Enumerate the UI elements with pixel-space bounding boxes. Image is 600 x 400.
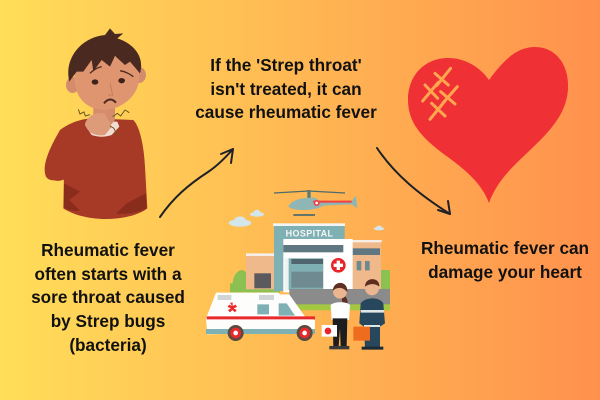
icon: paramedic [353, 279, 385, 350]
text: heart damage: Rheumatic fever can [421, 238, 589, 258]
text: strep throat warning: If the 'Strep throat' [210, 55, 362, 75]
text: how rheumatic fever starts: by Strep bugs [51, 311, 165, 331]
icon: damaged heart [408, 47, 568, 203]
icon: hospital scene [206, 190, 390, 350]
icon: clouds [229, 210, 384, 230]
icon: heart scars [423, 68, 457, 119]
building: tower [274, 224, 345, 291]
hospital sign: HOSPITAL [286, 229, 333, 239]
text: strep throat warning [195, 55, 377, 122]
road [289, 289, 390, 305]
text: heart damage: damage your heart [428, 262, 582, 282]
arrow: sore throat to fever [160, 149, 233, 217]
building: left wing [246, 254, 276, 289]
icon: boy with sore throat [45, 28, 147, 219]
icon: nurse [322, 283, 350, 349]
text: heart damage [421, 238, 589, 282]
text: strep throat warning: cause rheumatic fever [195, 102, 377, 122]
arrow: fever to heart damage [377, 148, 450, 214]
text: how rheumatic fever starts [31, 240, 185, 355]
text: how rheumatic fever starts: (bacteria) [69, 335, 147, 355]
building: right wing [347, 241, 381, 289]
icon: helicopter [274, 190, 357, 215]
text: how rheumatic fever starts: often starts with a [34, 264, 182, 284]
shrubs [230, 270, 390, 292]
icon: ambulance [206, 293, 315, 341]
text: strep throat warning: isn't treated, it can [210, 79, 362, 99]
text: how rheumatic fever starts: Rheumatic fever [41, 240, 175, 260]
building: main block [283, 239, 353, 292]
text: how rheumatic fever starts: sore throat caused [31, 287, 185, 307]
